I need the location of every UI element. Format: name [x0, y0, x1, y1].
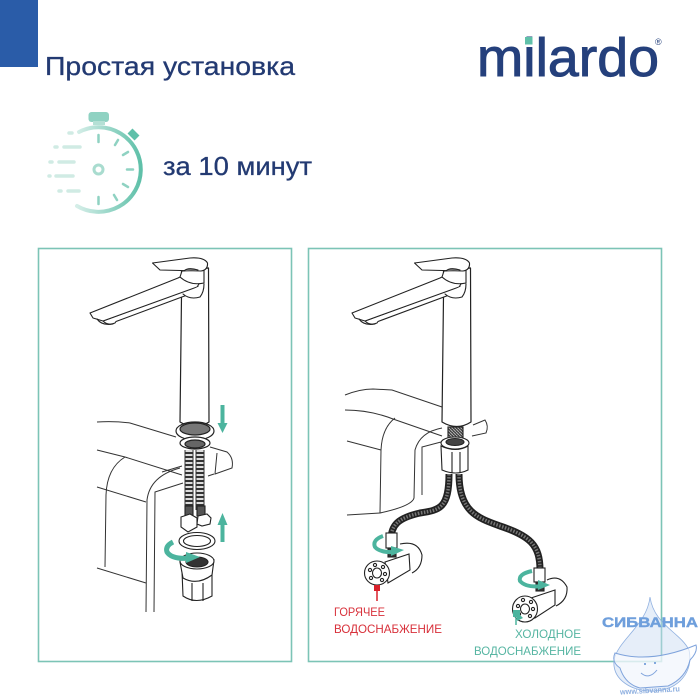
valve: cold: [512, 568, 567, 622]
braided hoses: [189, 450, 200, 510]
arrow: rotate: [167, 542, 192, 558]
hex nuts: [181, 506, 211, 532]
gasket ring: [179, 532, 215, 550]
label: cold water: ВОДОСНАБЖЕНИЕ: [474, 644, 581, 658]
subtitle: за 10 минут: [163, 151, 312, 181]
label: cold water: [474, 627, 581, 658]
panel: right step: [308, 248, 662, 662]
label: hot water: ГОРЯЧЕЕ: [334, 605, 385, 619]
mounting rings: [176, 422, 214, 449]
logo: milardo: ®: [655, 37, 662, 47]
hoses: [391, 474, 540, 570]
faucet: [352, 258, 471, 426]
marker: cold: [513, 610, 523, 625]
arrow: rotate hot: [374, 536, 404, 556]
arrow: down: [218, 405, 228, 433]
logo: milardo: milardo: [477, 28, 659, 88]
icon: stopwatch: [49, 112, 141, 212]
label: hot water: ВОДОСНАБЖЕНИЕ: [334, 622, 442, 636]
connector: [441, 427, 469, 473]
marker: hot: [374, 585, 380, 601]
watermark: Sibvanna: www.sibvanna.ru: [619, 684, 680, 697]
sink: [97, 422, 232, 612]
label: cold water: ХОЛОДНОЕ: [515, 627, 581, 641]
blue corner block: [0, 0, 38, 67]
label: hot water: [334, 605, 442, 636]
mounting nut: [180, 553, 214, 601]
panel: left step: [38, 248, 292, 662]
arrow: rotate cold: [520, 571, 550, 590]
title: Простая установка: [45, 51, 296, 81]
faucet: [90, 258, 209, 426]
sink: [345, 389, 487, 515]
watermark: Sibvanna: СИБВАННА: [602, 614, 698, 630]
watermark: Sibvanna: [602, 597, 698, 697]
valve: hot: [364, 533, 422, 585]
arrow: up: [218, 513, 228, 542]
